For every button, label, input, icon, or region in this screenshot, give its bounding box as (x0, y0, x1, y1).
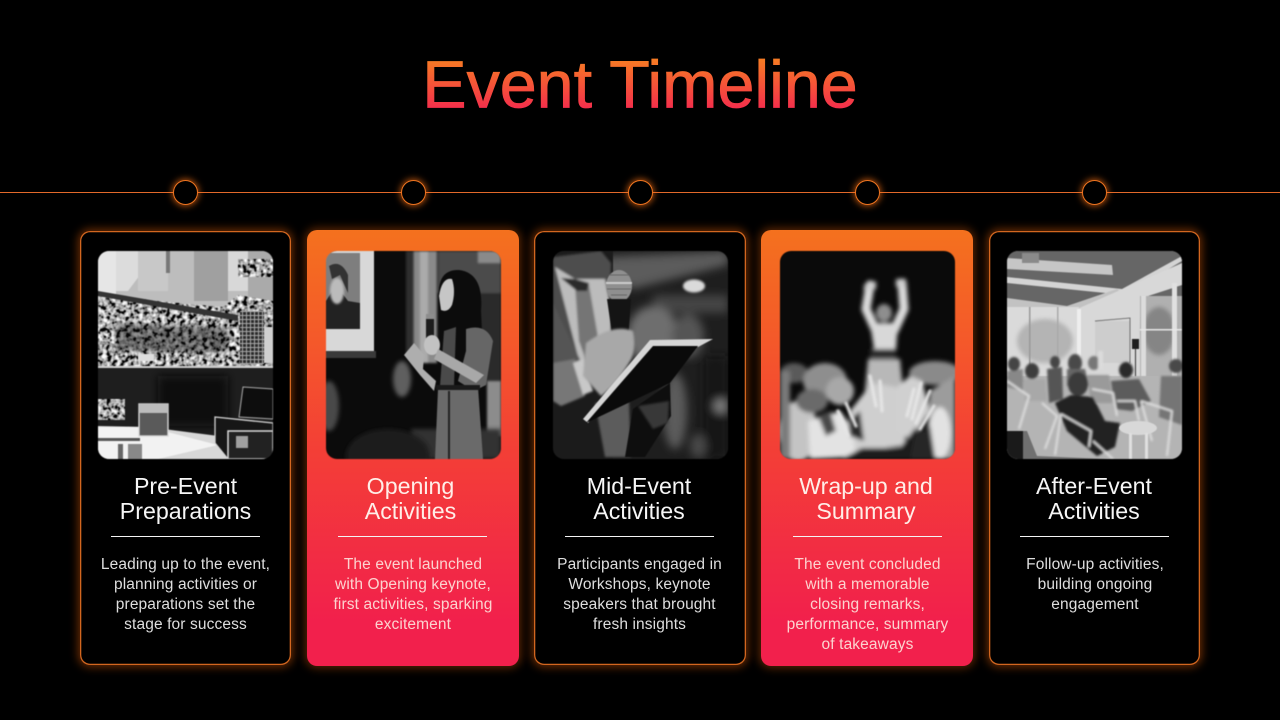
description: with Opening keynote, (335, 576, 491, 593)
description: engagement (1051, 596, 1139, 613)
description: fresh insights (593, 616, 686, 633)
description (557, 556, 722, 633)
description: The event launched (344, 556, 482, 573)
heading (1036, 472, 1152, 524)
description (101, 556, 270, 633)
heading: Summary (816, 498, 916, 524)
heading: Mid-Event (587, 472, 691, 498)
description: performance, summary (787, 616, 948, 633)
photo: stage rigging and flight cases (97, 250, 274, 460)
description: The event concluded (794, 556, 941, 573)
timeline marker 4 (855, 180, 880, 205)
heading (587, 472, 692, 524)
description: stage for success (124, 616, 247, 633)
heading: Activities (593, 498, 685, 524)
description: of takeaways (822, 636, 913, 653)
timeline marker 1 (173, 180, 198, 205)
title: Event Timeline (422, 48, 858, 122)
panel: after-event activities (989, 231, 1200, 665)
heading: Wrap-up and (799, 472, 933, 498)
description: Follow-up activities, (1026, 556, 1164, 573)
description: excitement (375, 616, 451, 633)
photo: performer above cheering crowd (779, 250, 956, 460)
description: with a memorable (805, 576, 930, 593)
description: building ongoing (1038, 576, 1152, 593)
description: Workshops, keynote (568, 576, 711, 593)
description (1026, 556, 1164, 613)
description: first activities, sparking (333, 596, 493, 613)
panel: opening activities (307, 230, 519, 666)
description: planning activities or (114, 576, 257, 593)
photo: audience seated in bright room (1006, 250, 1183, 460)
heading: Activities (365, 498, 456, 524)
description: speakers that brought (563, 596, 716, 613)
heading: Pre-Event (134, 472, 237, 498)
heading: Opening (367, 472, 454, 498)
heading: Preparations (120, 498, 251, 524)
timeline marker 5 (1082, 180, 1107, 205)
description: closing remarks, (810, 596, 925, 613)
panel: mid-event activities (534, 231, 746, 665)
timeline marker 2 (401, 180, 426, 205)
timeline marker 3 (628, 180, 653, 205)
description (787, 556, 948, 653)
timeline (0, 174, 1280, 211)
photo: speaker with microphone (325, 250, 502, 460)
photo: presenter holding microphone and clipboard (552, 250, 728, 460)
heading (120, 472, 251, 524)
description: Participants engaged in (557, 556, 722, 573)
description: preparations set the (116, 596, 255, 613)
description (333, 556, 493, 633)
heading (799, 472, 933, 524)
description: Leading up to the event, (101, 556, 270, 573)
heading: After-Event (1036, 472, 1152, 498)
panel: pre-event preparations (80, 231, 291, 665)
heading (364, 472, 456, 524)
panel: wrap-up and summary (761, 230, 973, 666)
heading: Activities (1048, 498, 1140, 524)
